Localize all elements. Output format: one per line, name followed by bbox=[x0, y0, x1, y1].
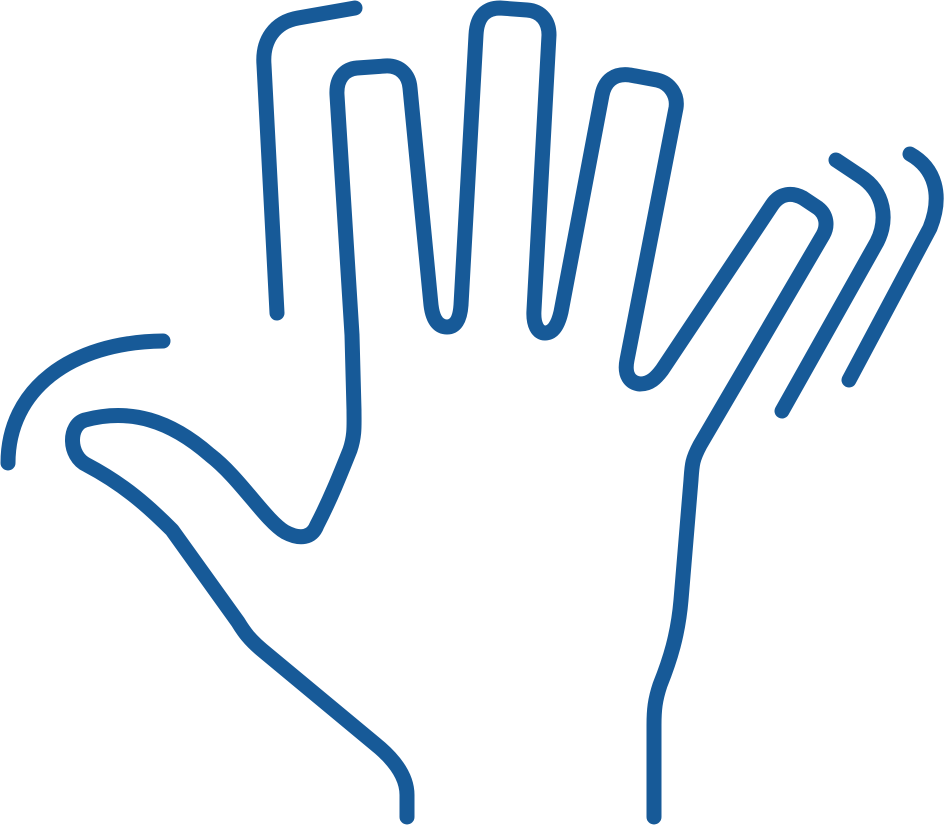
motion line: inner right of little finger bbox=[782, 160, 883, 411]
motion line: left of index finger bbox=[264, 8, 355, 313]
motion line: above thumb bbox=[8, 341, 163, 463]
hand outline bbox=[72, 8, 826, 817]
motion line: outer right of little finger bbox=[849, 154, 936, 380]
